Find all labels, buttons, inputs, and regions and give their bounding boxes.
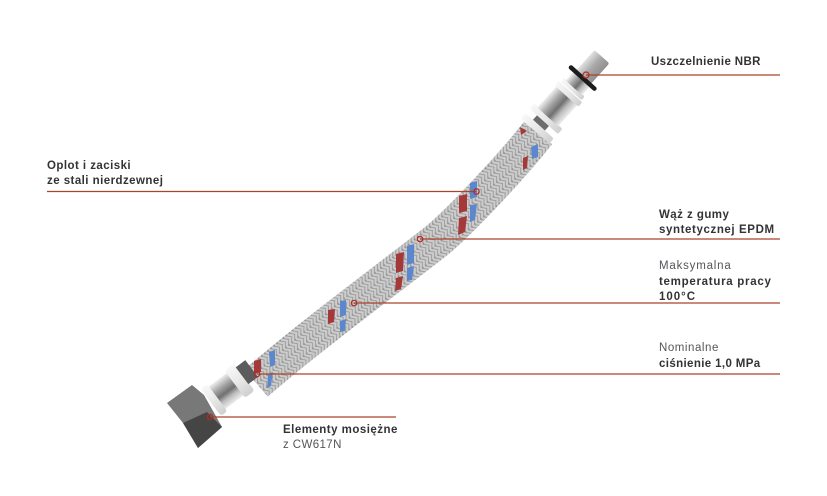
callout: braid and clamps: ze stali nierdzewnej — [47, 175, 163, 187]
threaded end — [576, 50, 609, 84]
hex nut — [167, 385, 222, 448]
callout: brass elements: Elementy mosiężne — [283, 424, 398, 436]
callout: max temperature: temperatura pracy — [659, 276, 772, 288]
callout: brass elements — [207, 414, 398, 451]
callout: max temperature: Maksymalna — [659, 260, 732, 272]
callout: nominal pressure: ciśnienie 1,0 MPa — [659, 358, 761, 370]
NBR seal — [568, 64, 598, 92]
callout: max temperature: 100°C — [659, 291, 696, 303]
hose — [254, 127, 538, 388]
callout: max temperature — [351, 260, 780, 306]
callout: EPDM hose: Wąż z gumy — [659, 209, 729, 221]
crimp collar — [521, 113, 554, 144]
callout: brass elements: z CW617N — [283, 439, 342, 451]
bottom brass fitting — [167, 357, 263, 448]
callout: braid and clamps: Oplot i zaciski — [47, 160, 131, 172]
callout: EPDM hose — [417, 209, 780, 242]
callout: nominal pressure: Nominalne — [659, 342, 719, 354]
braided sleeve — [256, 133, 538, 383]
callout: EPDM hose: syntetycznej EPDM — [659, 224, 775, 236]
callout: NBR seal: Uszczelnienie NBR — [651, 56, 761, 68]
top brass fitting — [521, 44, 616, 144]
brass body — [201, 357, 263, 416]
callout: braid and clamps — [47, 160, 479, 194]
red and blue inner hose stripes — [254, 127, 538, 388]
callout: nominal pressure — [254, 342, 780, 377]
callout: NBR seal — [583, 56, 780, 78]
